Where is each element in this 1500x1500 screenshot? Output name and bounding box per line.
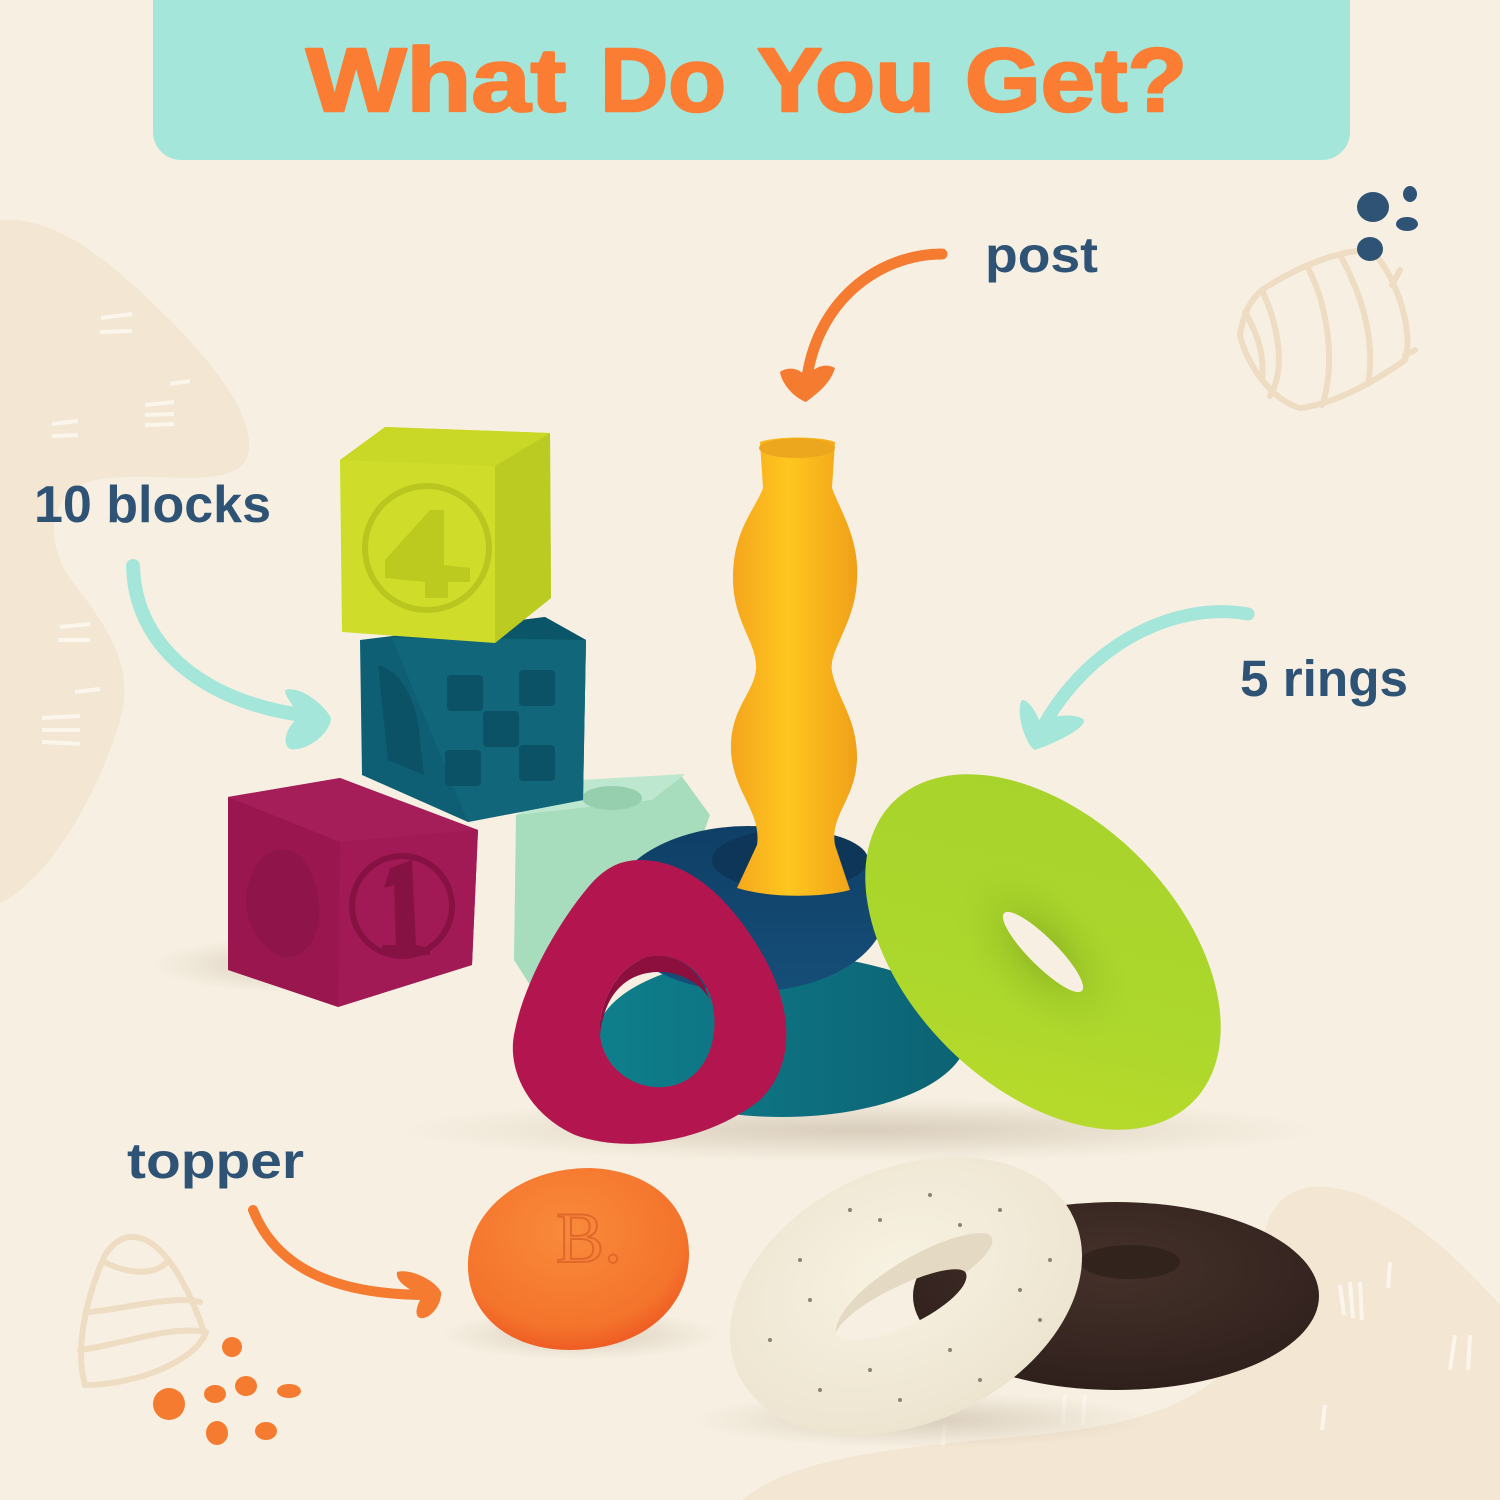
decorative dots: bottom left: [153, 1337, 301, 1445]
topper: B.: [556, 1198, 622, 1278]
block: magenta: [228, 778, 478, 1007]
background blob: bottom right: [742, 1187, 1500, 1500]
title: [306, 31, 1187, 131]
arrow: topper: [253, 1210, 441, 1318]
header banner: [153, 0, 1350, 160]
ring: cream speckled: [685, 1103, 1127, 1489]
title: Get?: [965, 31, 1187, 131]
shadows under toys: [150, 937, 1320, 1448]
arrow: post: [780, 254, 942, 402]
decorative doodle: bottom left shell: [80, 1237, 206, 1385]
label: 10 blocks: 10 blocks: [34, 476, 271, 534]
block: teal: [360, 617, 586, 822]
arrow: blocks: [133, 566, 331, 749]
title: What: [306, 31, 566, 131]
topper: [468, 1168, 689, 1350]
label: post: post: [985, 227, 1098, 283]
decorative doodle: top right shell: [1240, 250, 1415, 408]
post: [731, 438, 857, 896]
block: mint: [514, 774, 710, 985]
ring: navy: [610, 826, 886, 992]
label: topper: topper: [127, 1133, 304, 1189]
label: 5 rings: 5 rings: [1240, 650, 1408, 707]
arrow: rings: [1020, 612, 1248, 750]
ring: lime: [798, 707, 1288, 1197]
ring: magenta triangle: [513, 860, 786, 1144]
background blob: left: [0, 220, 249, 903]
ring: brown: [913, 1202, 1319, 1390]
title: You: [757, 31, 935, 131]
ring: teal lower: [597, 955, 967, 1117]
block: yellow: [340, 427, 551, 643]
decorative dots: top right: [1357, 186, 1418, 261]
title: Do: [600, 31, 726, 131]
